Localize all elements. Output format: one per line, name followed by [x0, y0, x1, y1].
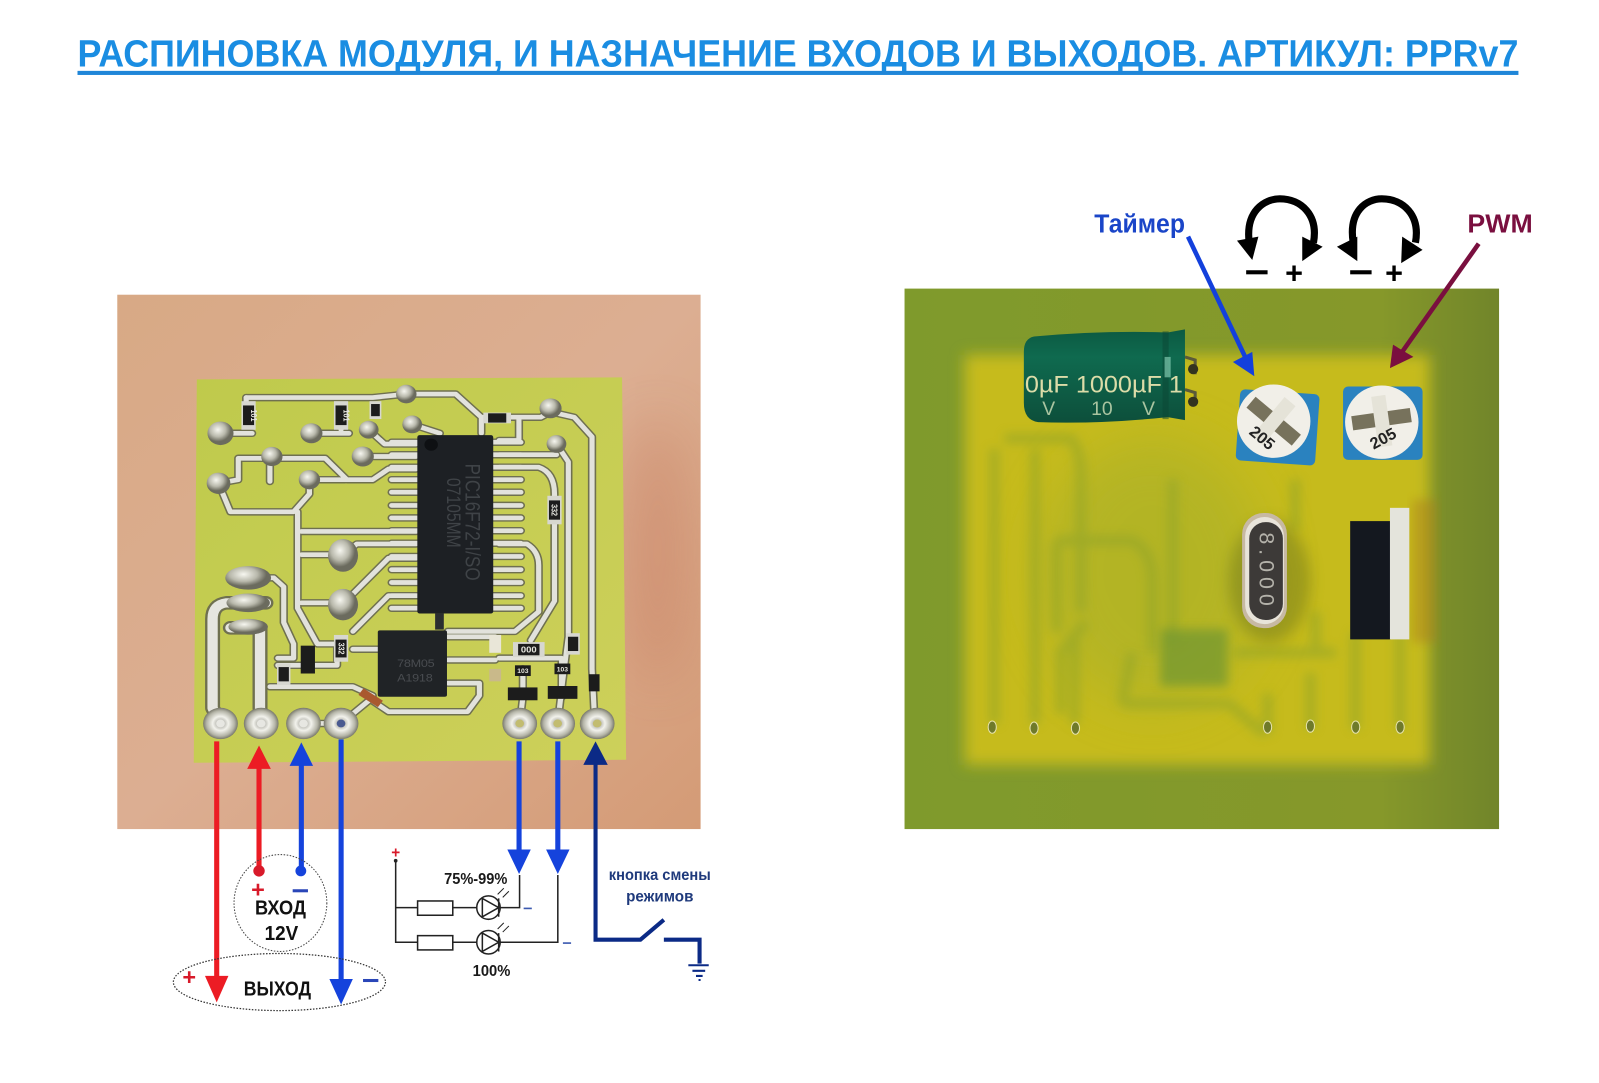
icon: rotation arrow PWM — [1337, 199, 1423, 263]
label: timer: Таймер — [1094, 211, 1185, 239]
panel: left module photo, solder side — [117, 295, 701, 829]
trimmer: PWM — [1343, 385, 1423, 460]
SMD resistors and transistors: 332 — [550, 504, 559, 516]
arrow: output minus (blue) — [329, 739, 353, 1004]
board background — [905, 289, 1499, 829]
arrow: output plus (red) — [205, 741, 228, 1002]
callout: output: ВЫХОД — [244, 978, 311, 1000]
arrow: LED output 100% — [546, 741, 570, 874]
LED circuit diagram: 100% — [473, 963, 511, 980]
SMD resistors and transistors: 103 — [517, 668, 529, 675]
capacitor: V — [1042, 398, 1055, 420]
trimmer: PWM: 205 — [1367, 425, 1400, 453]
crystal oscillator: 8.000 — [1254, 532, 1278, 606]
title: РАСПИНОВКА МОДУЛЯ, И НАЗНАЧЕНИЕ ВХОДОВ И ВЫХОДОВ. АРТИКУЛ: PPRv7 — [78, 32, 1518, 74]
label: mode change button: режимов — [626, 888, 693, 905]
LED circuit diagram: + — [391, 845, 400, 862]
blurred ghost traces seen through the board — [994, 439, 1400, 734]
SMD resistors and transistors — [241, 401, 600, 707]
voltage regulator: 78M05 — [397, 657, 435, 670]
microcontroller chip: PIC16F72-I/SO — [460, 464, 483, 581]
SMD resistors and transistors: 332 — [336, 643, 346, 654]
minus and plus signs — [1246, 256, 1403, 290]
capacitor: 10 — [1091, 398, 1113, 420]
capacitor: 0µF 1000µF 1 — [1025, 372, 1183, 399]
copper sheet background — [117, 295, 701, 829]
green circuit board — [194, 377, 626, 763]
SMD resistors and transistors: 101 — [341, 410, 351, 421]
microcontroller chip — [417, 435, 493, 630]
label: mode change button — [609, 867, 711, 905]
callout: output: + — [182, 964, 196, 990]
callout: input 12V: ВХОД — [255, 898, 306, 920]
callout: input 12V: + — [251, 876, 265, 902]
voltage regulator — [378, 630, 447, 697]
arrow: PWM — [1390, 244, 1479, 368]
SMD resistors and transistors: 103 — [557, 667, 568, 673]
arrow: input minus (blue) — [290, 742, 313, 876]
drilled holes — [988, 720, 1404, 734]
panel: right module photo, component side — [905, 289, 1499, 829]
microcontroller chip: 07105MM — [443, 478, 464, 548]
arrow: input plus (red) — [247, 745, 271, 877]
callout: input 12V — [234, 855, 327, 951]
LED circuit diagram — [391, 845, 571, 980]
LED circuit diagram: 75%-99% — [444, 871, 508, 888]
crystal oscillator — [1242, 513, 1287, 628]
label: PWM: PWM — [1467, 211, 1533, 239]
arrow: mode button input with switch and ground — [583, 741, 709, 980]
capacitor — [1024, 329, 1198, 423]
arrow: LED output 75%-99% — [507, 741, 531, 874]
minus and plus signs: + — [1285, 256, 1303, 290]
icon: rotation arrow timer — [1237, 199, 1323, 261]
label: mode change button: кнопка смены — [609, 867, 711, 884]
SMD resistors and transistors: 101 — [249, 410, 258, 421]
black connector with white strip — [1350, 508, 1409, 639]
yellow inner zone — [965, 355, 1430, 765]
SMD resistors and transistors: 000 — [521, 645, 537, 654]
solder traces and component pads — [203, 385, 615, 739]
callout: output — [173, 953, 385, 1011]
trimmer: timer: 205 — [1246, 423, 1278, 454]
minus and plus signs: + — [1385, 256, 1403, 290]
trimmer: timer — [1235, 383, 1320, 466]
arrow: timer — [1188, 237, 1254, 376]
capacitor: V — [1142, 398, 1155, 420]
voltage regulator: A1918 — [397, 671, 433, 684]
callout: input 12V: 12V — [265, 923, 299, 945]
